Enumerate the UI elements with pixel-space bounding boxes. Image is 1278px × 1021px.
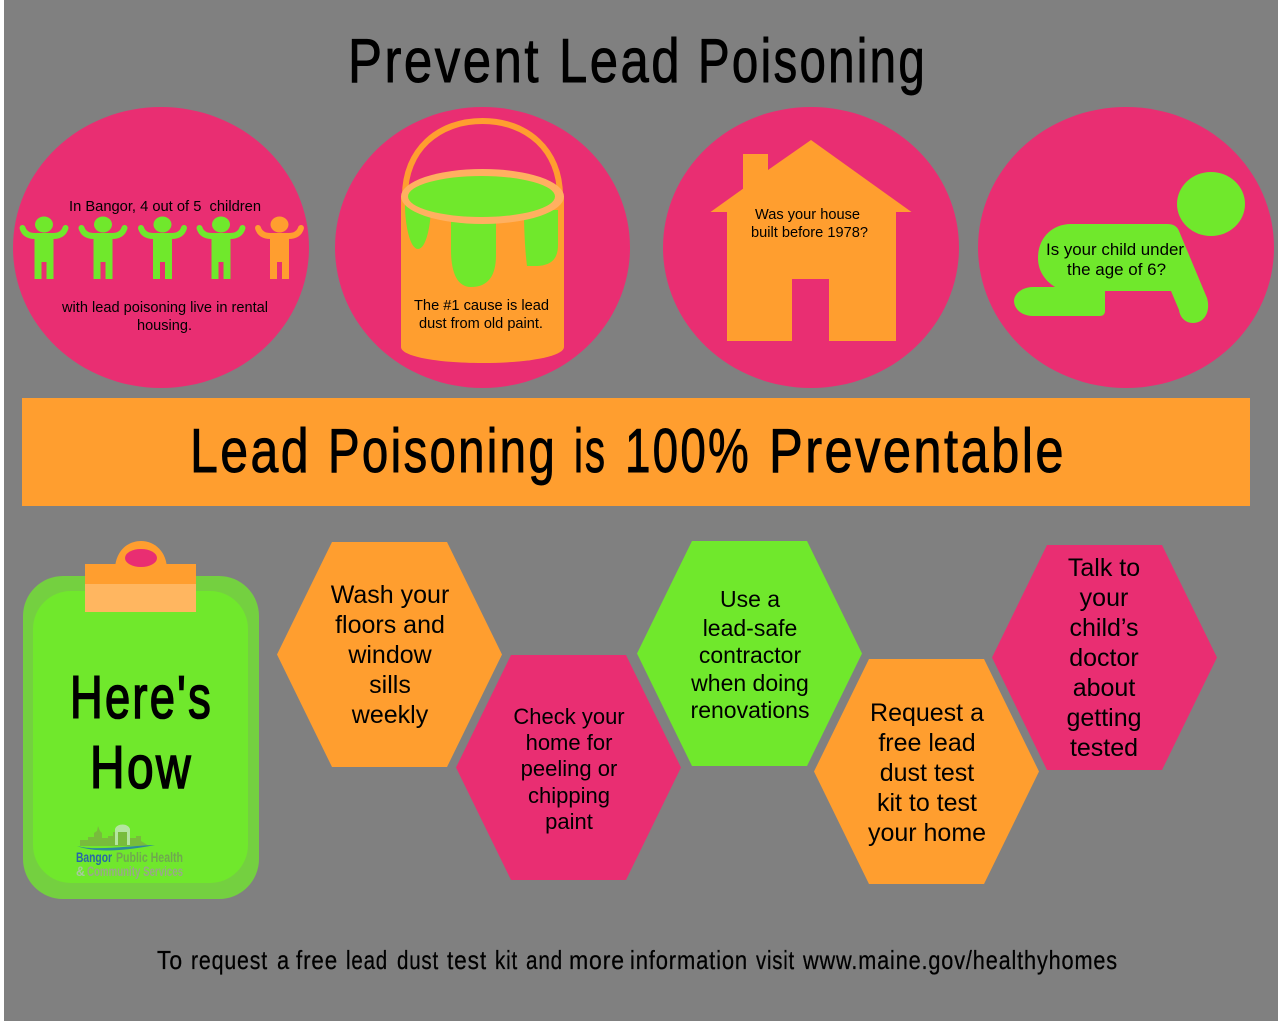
- hexagon step: test kit: kit to test: [877, 789, 977, 817]
- hexagon step: contractor: when doing: [690, 670, 809, 696]
- hexagon step: check paint: home for: [526, 730, 612, 755]
- text: number one cause: [414, 298, 549, 332]
- text: house question: built before 1978?: [751, 225, 868, 241]
- hexagon step: wash: window: [347, 641, 433, 669]
- panel: clipboard: [23, 541, 259, 899]
- icon: house: [710, 140, 912, 341]
- text: Bangor statistic: In Bangor, 4 out of 5 children: [69, 199, 261, 215]
- banner heading: is: [574, 417, 607, 486]
- footer text: www.maine.gov/healthyhomes: [802, 945, 1118, 975]
- icons: five children: [22, 216, 301, 279]
- panel: house age: [663, 107, 959, 388]
- footer text: visit: [756, 945, 795, 975]
- banner: [22, 398, 1250, 506]
- text: number one cause: The #1 cause is lead: [414, 298, 549, 314]
- footer text: request: [191, 945, 268, 975]
- hexagon step: wash: weekly: [351, 701, 429, 729]
- hexagon step: doctor: [992, 545, 1217, 770]
- icon: crawling child: [1014, 172, 1245, 323]
- text: child question: the age of 6?: [1067, 261, 1166, 279]
- clipboard heading: Here's: [70, 664, 213, 731]
- footer text: test: [447, 945, 487, 975]
- hexagon step: test kit: [814, 659, 1039, 884]
- footer text: kit: [495, 945, 518, 975]
- hexagon step: test kit: your home: [868, 819, 986, 847]
- text: house question: [751, 207, 868, 241]
- hexagon step: check paint: Check your: [513, 704, 625, 729]
- hexagon step: check paint: paint: [545, 809, 593, 834]
- footer text: To: [157, 945, 183, 975]
- text: rental housing: housing.: [137, 318, 192, 334]
- hexagon step: contractor: [637, 541, 862, 766]
- clipboard heading: [70, 664, 213, 801]
- logo: Bangor Public Health: Community Services: [87, 863, 183, 879]
- hexagon step: contractor: lead-safe: [703, 615, 797, 641]
- hexagon step: wash: [277, 542, 502, 767]
- hexagon step: doctor: about: [1073, 674, 1135, 702]
- footer text: a: [277, 945, 290, 975]
- logo: Bangor Public Health: Public Health: [116, 849, 183, 865]
- hexagon step: doctor: tested: [1070, 734, 1138, 762]
- footer text: and: [526, 945, 563, 975]
- hexagon step: check paint: chipping: [528, 783, 610, 808]
- panel: child age: [978, 107, 1274, 388]
- hexagon step: test kit: free lead: [878, 729, 976, 757]
- logo: Bangor Public Health: [76, 824, 183, 879]
- text: rental housing: [61, 300, 268, 334]
- hexagon step: doctor: child’s: [1069, 614, 1139, 642]
- footer text: lead: [346, 945, 388, 975]
- text: rental housing: with lead poisoning live in rental: [61, 300, 268, 316]
- banner heading: Lead: [190, 417, 311, 486]
- text: child question: Is your child under: [1046, 241, 1185, 259]
- hexagon step: contractor: Use a: [720, 586, 780, 612]
- text: number one cause: dust from old paint.: [419, 316, 543, 332]
- footer text: dust: [397, 945, 439, 975]
- hexagon step: contractor: contractor: [699, 642, 801, 668]
- logo: Bangor Public Health: &: [76, 863, 85, 879]
- hexagon step: contractor: renovations: [691, 697, 809, 723]
- hexagon step: test kit: dust test: [880, 759, 974, 787]
- text: house question: Was your house: [755, 207, 860, 223]
- hexagon step: doctor: doctor: [1069, 644, 1139, 672]
- banner heading: 100%: [625, 417, 751, 486]
- banner heading: Poisoning: [328, 417, 557, 486]
- logo: Bangor Public Health: Bangor: [76, 849, 112, 865]
- hexagon step: wash: sills: [369, 671, 411, 699]
- banner heading: Preventable: [769, 417, 1066, 486]
- hexagon step: wash: floors and: [335, 611, 445, 639]
- hexagon step: check paint: [456, 655, 681, 880]
- hexagon step: doctor: your: [1080, 584, 1128, 612]
- title: Lead: [559, 27, 682, 96]
- text: child question: [1046, 241, 1185, 279]
- title: Poisoning: [698, 27, 927, 96]
- footer text: information: [630, 945, 748, 975]
- panel: paint can: [335, 107, 630, 388]
- hexagon step: test kit: Request a: [870, 699, 984, 727]
- hexagon step: check paint: peeling or: [521, 756, 617, 781]
- hexagon step: doctor: getting: [1066, 704, 1142, 732]
- banner heading: [190, 417, 1066, 486]
- icon: paint can: [401, 121, 564, 363]
- clipboard clip: [85, 541, 196, 612]
- footer text: more: [569, 945, 625, 975]
- clipboard heading: How: [90, 734, 193, 801]
- hexagon step: doctor: Talk to: [1068, 554, 1140, 582]
- title: Prevent: [348, 27, 541, 96]
- hexagon step: wash: Wash your: [331, 581, 449, 609]
- footer text: free: [296, 945, 338, 975]
- panel: rental housing statistic: [13, 107, 309, 388]
- footer text: [157, 945, 1118, 975]
- title: [348, 27, 927, 96]
